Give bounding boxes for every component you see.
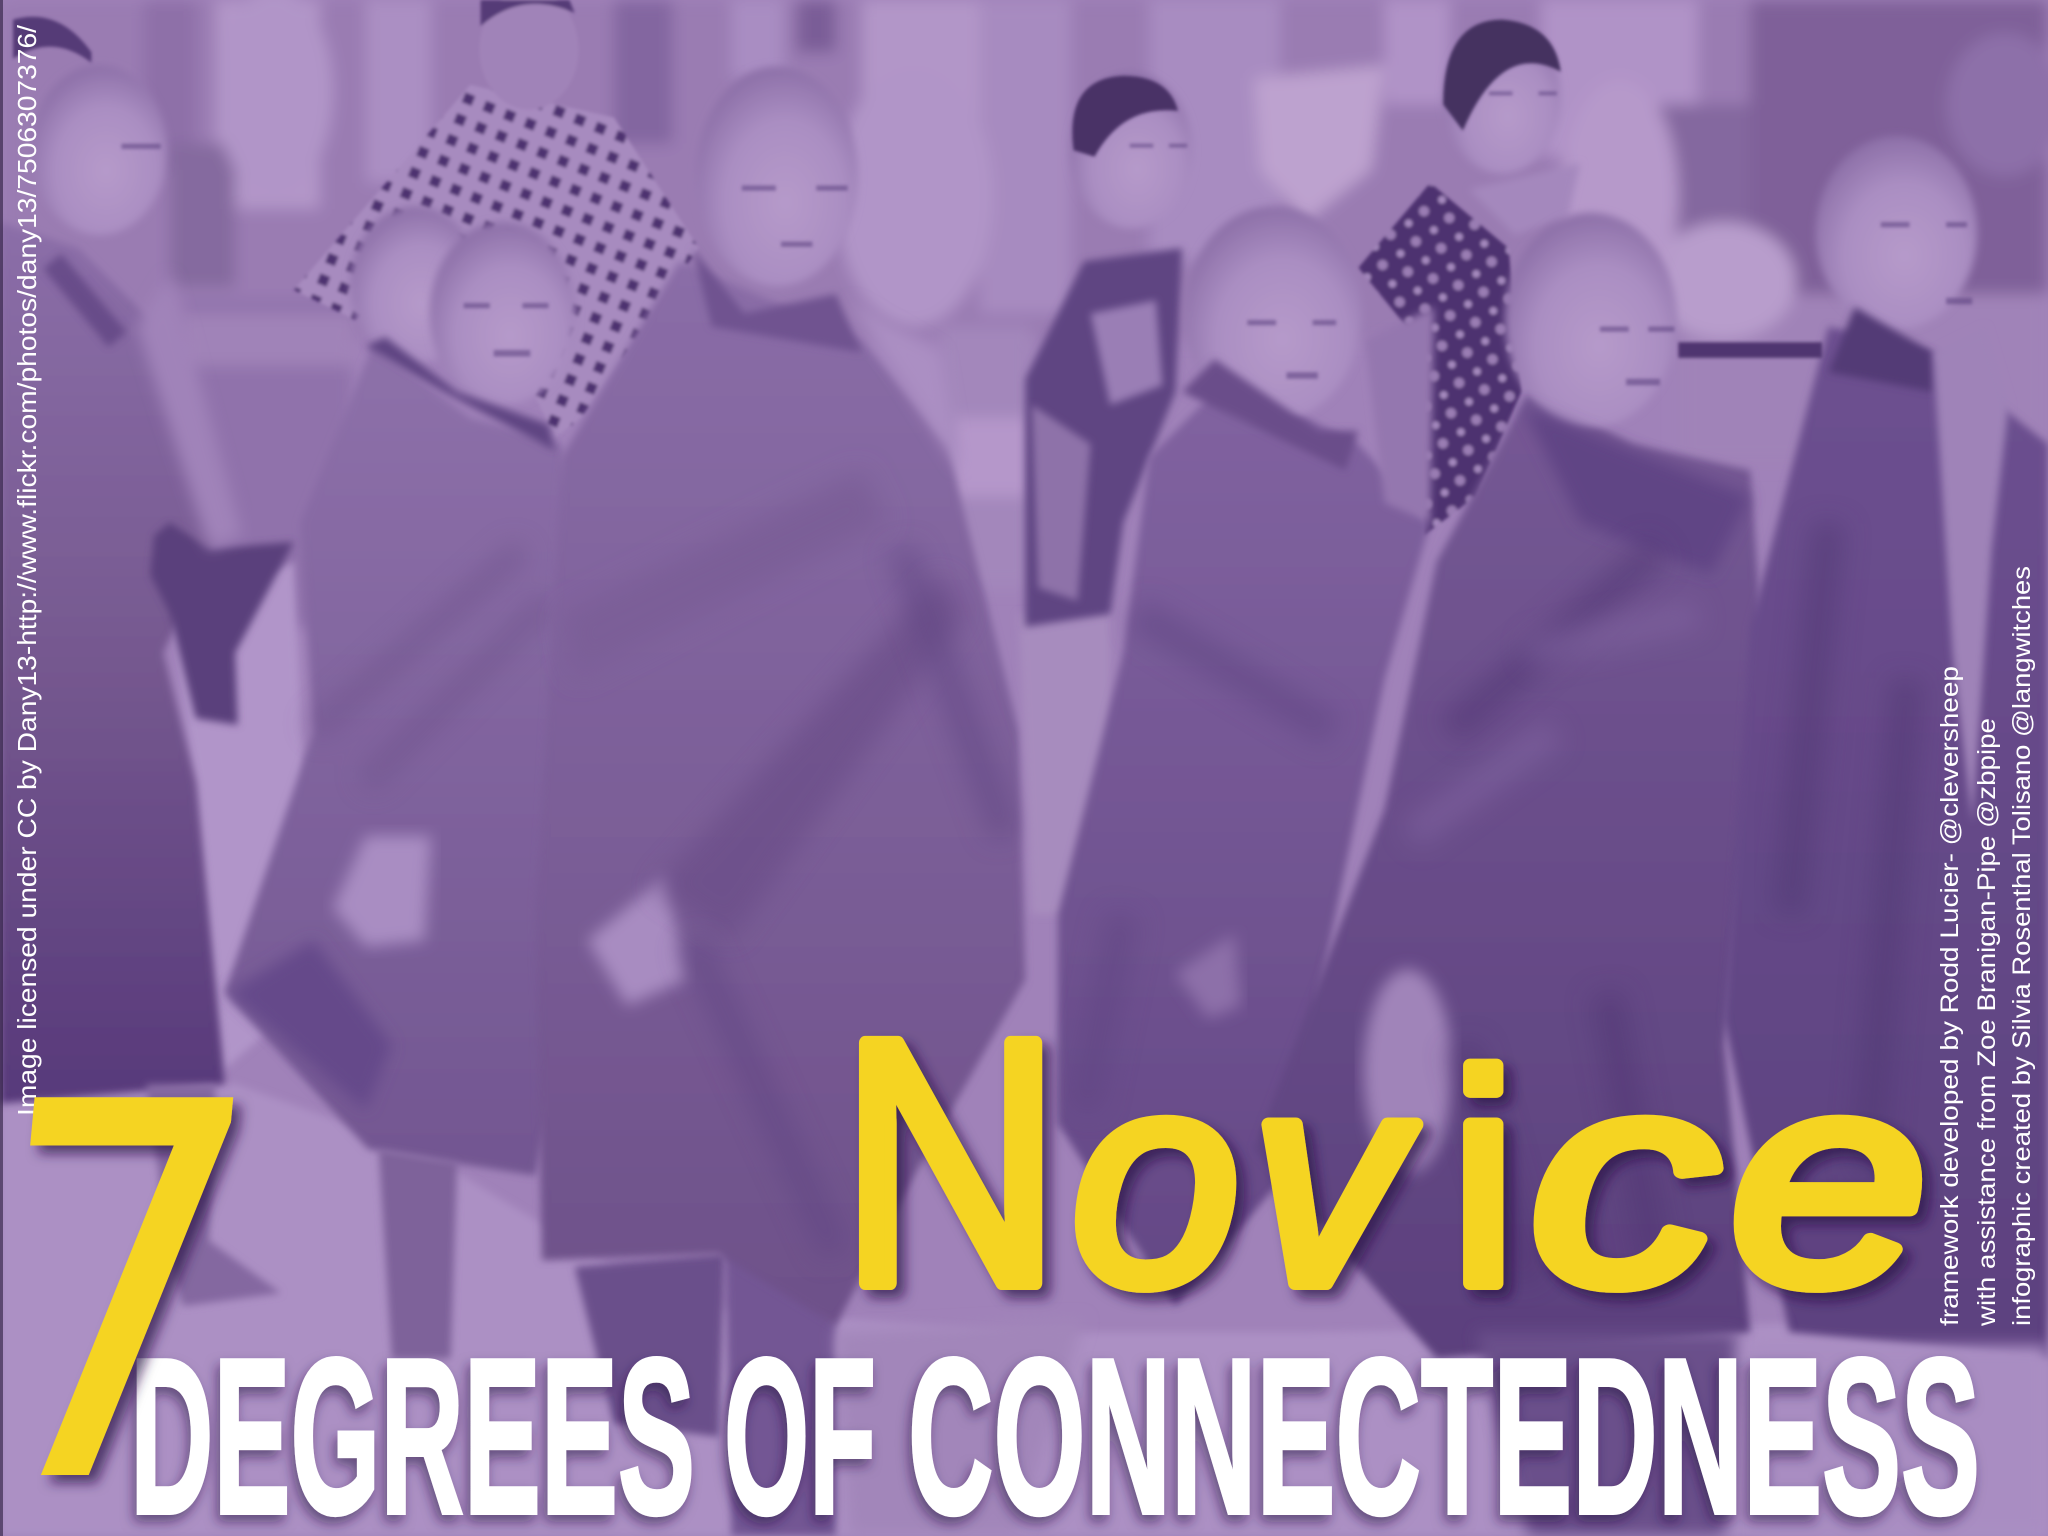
foreground lower right shading <box>836 1319 2048 1536</box>
image credit rotated text: Image licensed under CC by Dany13-http://www.flickr.com/photos/dany13/7506307376/ <box>12 24 42 1116</box>
title: Novice: i <box>1450 1011 1517 1347</box>
centre monk <box>536 67 1025 1536</box>
credit line: infographic: infographic created by Silvia Rosenthal Tolisano @langwitches <box>2008 566 2036 1326</box>
title: Novice: ov <box>1072 1011 1421 1347</box>
fifth monk <box>1254 213 1763 1536</box>
fourth monk with raised arm <box>1058 206 1434 1306</box>
credit line: framework: framework developed by Rodd Lucier- @cleversheep <box>1936 666 1964 1326</box>
title: Novice: N <box>840 967 1061 1357</box>
temple background columns <box>0 0 2048 627</box>
title: degrees of connectedness <box>130 1313 1980 1536</box>
floor <box>0 562 2048 1536</box>
sixth monk <box>1678 136 2048 1358</box>
framework credits rotated text <box>1936 566 2036 1327</box>
second monk and boy behind <box>225 206 576 1358</box>
woman in patterned dress <box>1358 20 1580 536</box>
boy in dark shirt <box>1019 72 1192 914</box>
faces <box>121 91 1972 385</box>
title: Novice <box>840 967 1927 1357</box>
title: Novice: e <box>1730 1011 1927 1347</box>
man in checked shirt <box>294 0 699 438</box>
far left monk <box>0 17 294 1306</box>
credit line: assistance: with assistance from Zoe Branigan-Pipe @zbpipe <box>1973 718 2001 1327</box>
title: Novice: c <box>1530 1011 1719 1347</box>
